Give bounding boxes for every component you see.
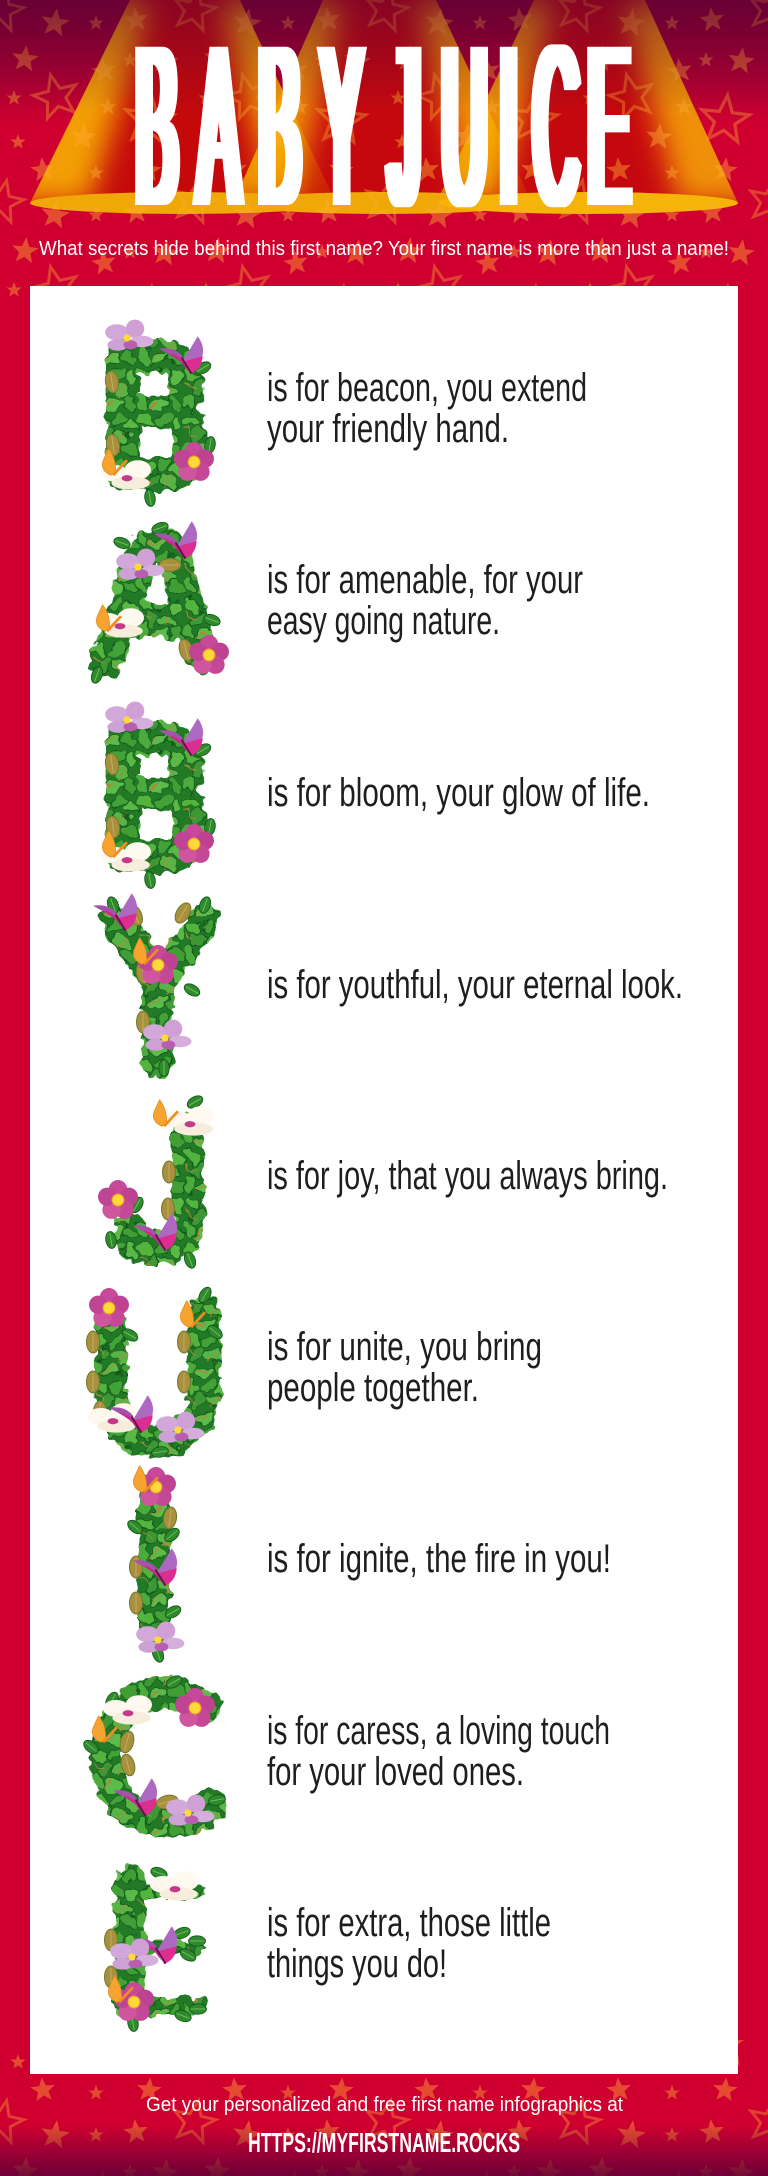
- footer text: Get your personalized and free first name infographics at: [146, 2094, 623, 2116]
- text: U line: is for unite, you bring: [267, 1325, 542, 1369]
- text: C line: for your loved ones.: [267, 1750, 524, 1794]
- spotlight right: [440, 0, 738, 203]
- title: BABYJUICE: [136, 0, 629, 254]
- icon: floral letter B: [102, 702, 217, 889]
- subtitle: What secrets hide behind this first name? Your first name is more than just a name!: [39, 238, 729, 260]
- icon: floral letter A: [89, 520, 229, 685]
- text: B line: is for beacon, you extend: [267, 366, 587, 410]
- text: A line: [267, 558, 583, 643]
- icon: floral letter I: [125, 1466, 184, 1664]
- text: C line: [267, 1709, 610, 1794]
- text: A line: is for amenable, for your: [267, 558, 583, 602]
- icon: floral letter Y: [93, 893, 213, 1076]
- footer url: HTTPS://MYFIRSTNAME.ROCKS: [248, 2127, 520, 2158]
- text: C line: is for caress, a loving touch: [267, 1709, 610, 1753]
- text: U line: [267, 1325, 542, 1410]
- text: E line: is for extra, those little: [267, 1901, 551, 1945]
- spotlight left: [30, 0, 331, 203]
- icon: floral letter U: [86, 1285, 225, 1459]
- text: E line: things you do!: [267, 1942, 447, 1986]
- spotlight centre: [242, 0, 527, 195]
- text: E line: [267, 1901, 551, 1986]
- icon: floral letter B: [102, 320, 217, 507]
- panel: letters: [30, 286, 738, 2074]
- text: U line: people together.: [267, 1366, 479, 1410]
- text: B line: [267, 366, 587, 451]
- text: A line: easy going nature.: [267, 599, 500, 643]
- spotlights: [0, 0, 768, 214]
- icon: floral letter C: [81, 1673, 226, 1826]
- text: I line: is for ignite, the fire in you!: [267, 1537, 611, 1581]
- icon: floral letter J: [98, 1093, 214, 1270]
- text: B line: your friendly hand.: [267, 407, 509, 451]
- icon: floral letter E: [104, 1865, 206, 2032]
